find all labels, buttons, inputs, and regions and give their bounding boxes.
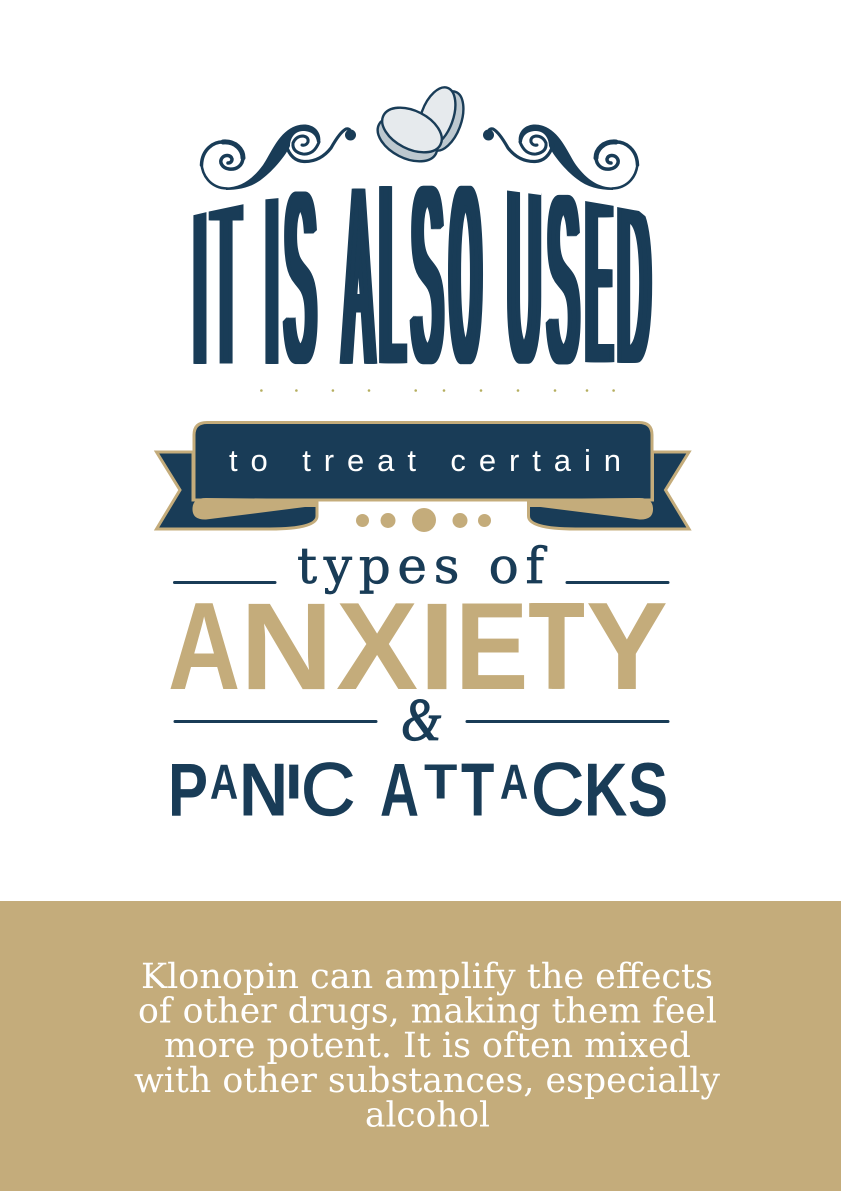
body text [134, 957, 720, 1136]
heading: IT IS ALSO USED: S [548, 146, 579, 414]
ribbon left tail [156, 452, 317, 529]
heading: PANIC ATTACKS: I [285, 754, 302, 810]
heading: PANIC ATTACKS: S [628, 747, 668, 832]
heading: PANIC ATTACKS: T [424, 754, 457, 810]
heading: ANXIETY: N [240, 577, 333, 716]
ribbon left fold [192, 498, 318, 520]
heading: PANIC ATTACKS: A [210, 754, 238, 810]
left rule beside types of [174, 581, 275, 584]
heading: IT IS ALSO USED: U [508, 136, 540, 417]
heading: IT IS ALSO USED: D [618, 157, 650, 413]
panel: gold footer band [0, 901, 841, 1191]
heading: ANXIETY: I [419, 577, 455, 716]
heading: ANXIETY: A [168, 577, 240, 716]
heading: IT IS ALSO USED: E [587, 149, 611, 415]
heading: PANIC ATTACKS [168, 747, 668, 832]
ribbon main panel [194, 422, 652, 500]
ribbon right tail [528, 452, 689, 529]
heading: PANIC ATTACKS: N [239, 747, 288, 832]
body text: Klonopin can amplify the effects [141, 957, 713, 997]
heading: IT IS ALSO USED: T [212, 153, 241, 415]
heading: types of: types of [297, 537, 547, 595]
heading: ANXIETY: E [455, 577, 528, 716]
right rule beside ampersand [467, 720, 668, 723]
heading: PANIC ATTACKS: C [531, 748, 584, 831]
heading: IT IS ALSO USED: S [412, 135, 443, 417]
ribbon banner [156, 422, 689, 529]
heading: PANIC ATTACKS: C [301, 748, 355, 831]
heading: IT IS ALSO USED: I [192, 163, 206, 413]
heading: PANIC ATTACKS: P [168, 747, 208, 832]
heading: PANIC ATTACKS: K [584, 747, 627, 832]
body text: alcohol [365, 1096, 490, 1136]
heading: IT IS ALSO USED: A [344, 134, 372, 419]
heading: ANXIETY: T [530, 577, 583, 716]
left rule beside ampersand [175, 720, 376, 723]
heading: IT IS ALSO USED [193, 186, 652, 364]
heading: IT IS ALSO USED: S [285, 142, 316, 415]
heading: ANXIETY: X [336, 577, 418, 716]
heading: ANXIETY [168, 577, 668, 716]
heading: PANIC ATTACKS: T [461, 747, 494, 832]
icon: left scroll ornament [202, 124, 356, 190]
heading: IT IS ALSO USED: O [451, 135, 480, 417]
heading: IT IS ALSO USED: L [380, 132, 404, 420]
body text: with other substances, especially [134, 1061, 720, 1101]
heading: PANIC ATTACKS: A [500, 754, 528, 810]
dotted row under title [260, 389, 615, 392]
body text: of other drugs, making them feel [138, 992, 717, 1032]
icon: right scroll ornament [483, 124, 638, 190]
heading: ANXIETY: Y [586, 577, 668, 716]
body text: more potent. It is often mixed [164, 1026, 691, 1066]
ampersand: & [401, 687, 441, 753]
icon: pills [370, 82, 471, 170]
heading: PANIC ATTACKS: A [380, 747, 419, 832]
gold dots divider [356, 508, 491, 532]
heading: IT IS ALSO USED: I [264, 145, 278, 417]
ribbon text: to treat certain [229, 443, 621, 478]
ribbon right fold [528, 498, 653, 520]
right rule beside types of [567, 581, 668, 584]
